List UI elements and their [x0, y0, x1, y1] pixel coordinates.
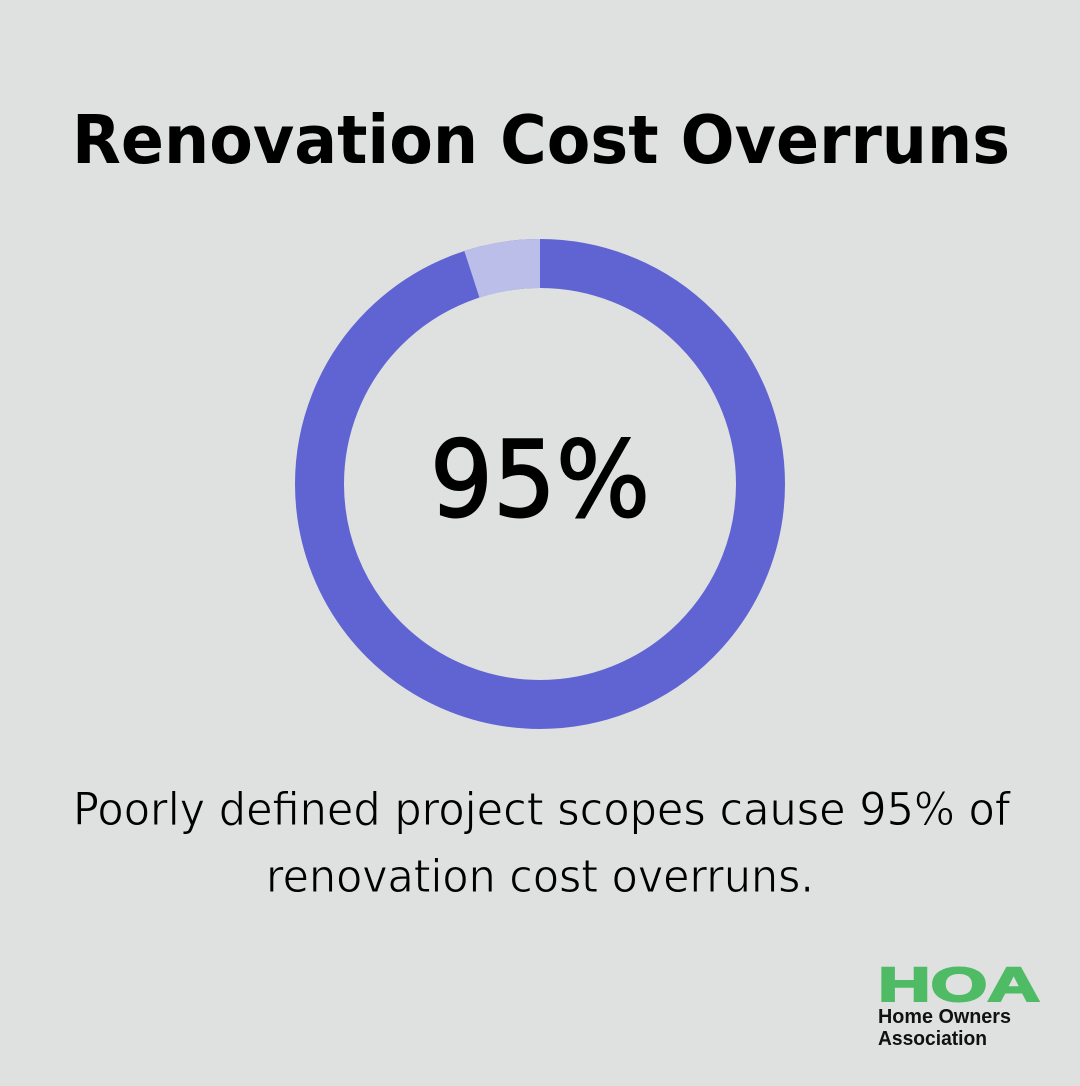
description text	[73, 783, 1011, 903]
description text: Poorly defined project scopes cause 95% of	[73, 783, 1011, 836]
donut chart: 95 percent	[320, 264, 760, 704]
title: Renovation Cost Overruns	[72, 101, 1010, 179]
logo text: Home Owners	[878, 1006, 1011, 1028]
donut value: 95%	[430, 419, 650, 541]
logo text: Association	[878, 1028, 987, 1050]
logo: Home Owners Association	[878, 959, 1040, 1050]
description text: renovation cost overruns.	[266, 850, 814, 903]
logo text	[878, 1006, 1011, 1050]
logo mark: HOA: HOA	[878, 959, 1040, 1012]
